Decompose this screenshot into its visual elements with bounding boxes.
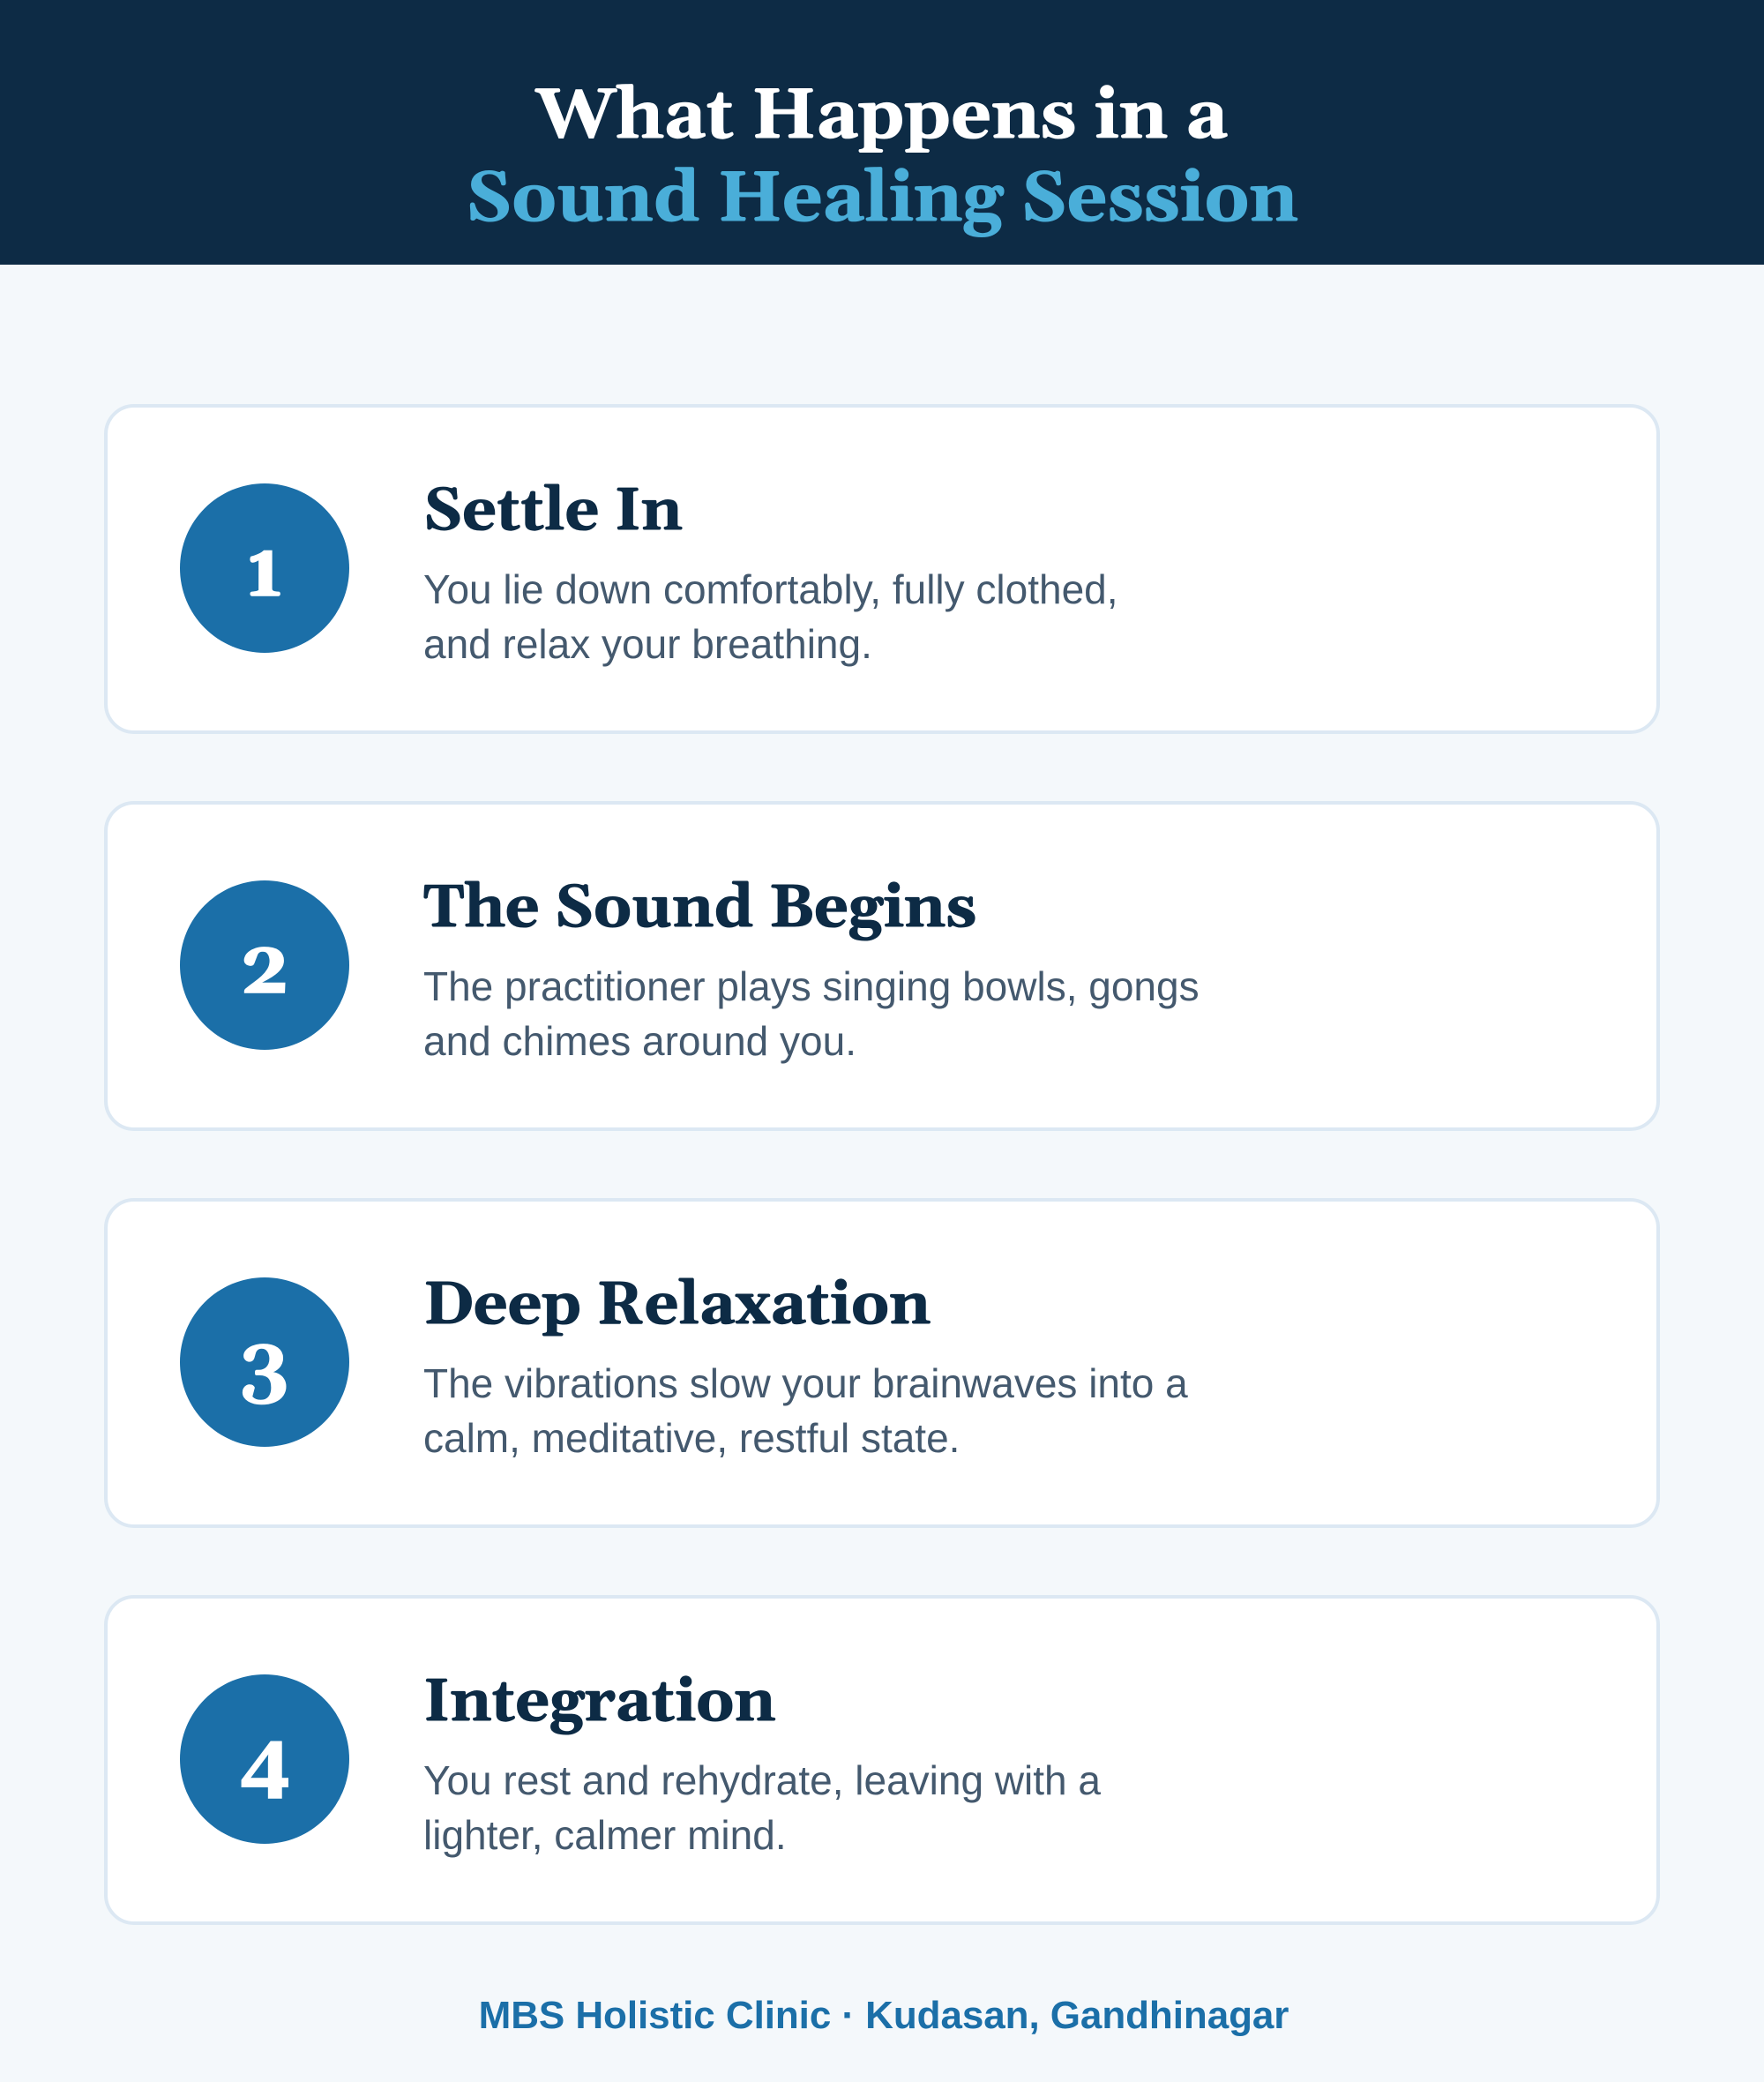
panel: step 3 <box>104 1198 1660 1528</box>
step 1 heading: Settle In <box>423 475 683 550</box>
step 2 number badge <box>180 880 349 1050</box>
step 4 heading: Integration <box>423 1666 775 1741</box>
step 4 number badge: 4 <box>240 1722 289 1817</box>
footer: MBS Holistic Clinic · Kudasan, Gandhinagar <box>479 1994 1289 2037</box>
step 1 number badge <box>180 483 349 653</box>
panel: step 4 <box>104 1595 1660 1925</box>
title: What Happens in a <box>536 73 1228 162</box>
step 1 description <box>423 566 1118 667</box>
step 2 heading: The Sound Begins <box>423 872 976 947</box>
step 2 description <box>423 963 1200 1064</box>
step 4 description: lighter, calmer mind. <box>423 1812 787 1858</box>
step 3 heading: Deep Relaxation <box>423 1269 931 1344</box>
step 3 description: The vibrations slow your brainwaves into a <box>423 1360 1188 1406</box>
step 3 number badge: 3 <box>241 1318 288 1416</box>
step 4 number badge <box>180 1674 349 1844</box>
step 2 description: The practitioner plays singing bowls, gongs <box>423 963 1200 1009</box>
step 2 description: and chimes around you. <box>423 1018 856 1064</box>
panel: step 1 <box>104 404 1660 734</box>
header banner <box>0 0 1764 265</box>
step 1 description: You lie down comfortably, fully clothed, <box>423 566 1118 612</box>
step 2 number badge: 2 <box>241 921 288 1019</box>
step 3 description: calm, meditative, restful state. <box>423 1415 960 1461</box>
step 3 number badge <box>180 1277 349 1447</box>
panel: step 2 <box>104 801 1660 1131</box>
title <box>466 73 1298 245</box>
step 1 number badge: 1 <box>246 524 283 622</box>
step 3 description <box>423 1360 1188 1461</box>
step 4 description <box>423 1757 1101 1858</box>
title: Sound Healing Session <box>466 156 1298 245</box>
step 4 description: You rest and rehydrate, leaving with a <box>423 1757 1101 1803</box>
step 1 description: and relax your breathing. <box>423 621 872 667</box>
